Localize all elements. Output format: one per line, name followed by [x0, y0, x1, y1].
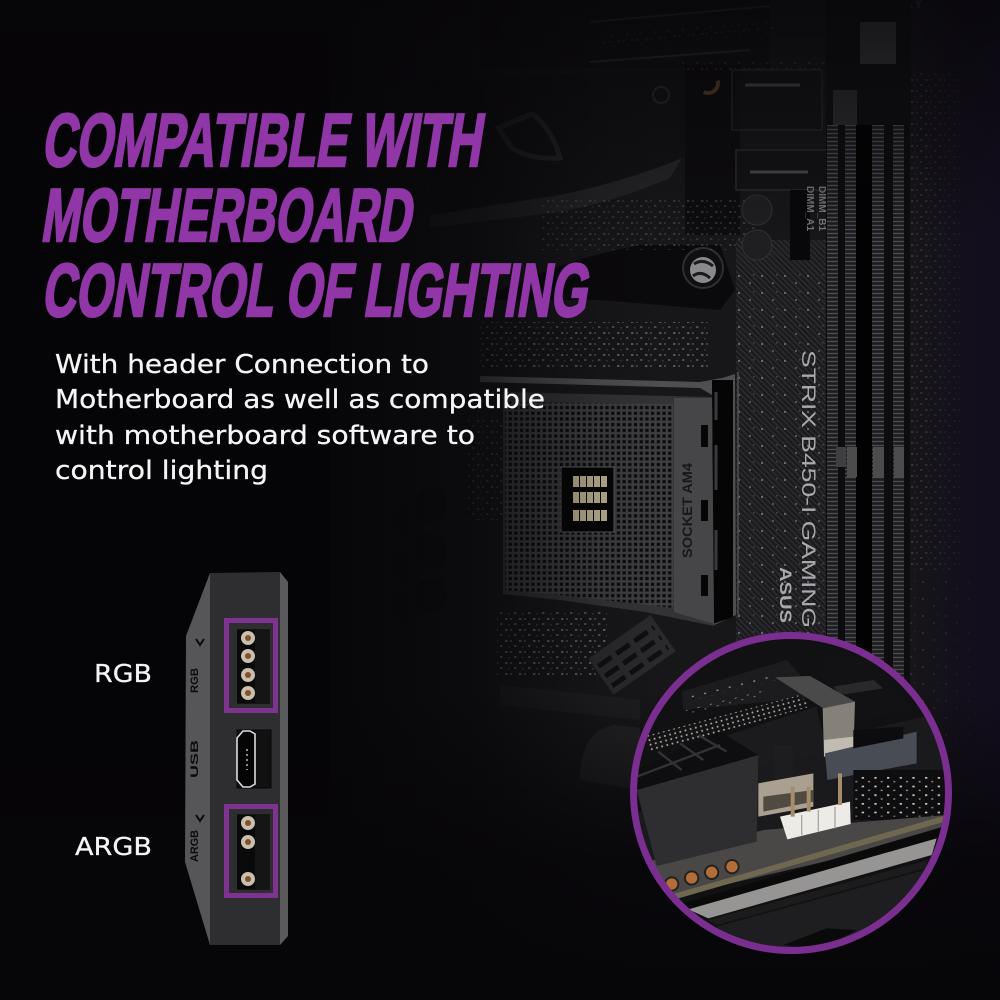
socket label: SOCKET AM4: [679, 463, 695, 558]
board text: ASUS: [776, 567, 795, 623]
side labels: [189, 639, 204, 862]
component dots field: [468, 60, 980, 750]
8-pin power connector: [637, 732, 758, 866]
bottom dark area: [717, 870, 925, 953]
board text: [776, 350, 818, 628]
title: CONTROL OF LIGHTING: [38, 248, 597, 332]
circular connector close-up: [630, 633, 953, 957]
lower dark heatsink: [480, 245, 735, 310]
body text: With header Connection to: [55, 350, 429, 380]
SATA ports: [732, 70, 831, 190]
metal bracket: [775, 676, 855, 708]
screw: [683, 248, 723, 288]
title: [37, 98, 597, 332]
icon: ROG circuit art: [588, 615, 676, 695]
body text: [55, 350, 545, 486]
white connector: [780, 773, 851, 839]
lower component area: [853, 770, 947, 820]
board background: [630, 633, 953, 957]
socket centre: [561, 467, 614, 532]
purple ring: [634, 636, 948, 950]
title: MOTHERBOARD: [37, 173, 421, 257]
gold pads: [665, 860, 739, 891]
side labels: ARGB: [189, 830, 201, 862]
CPU socket: [480, 372, 738, 626]
side labels: RGB: [189, 668, 201, 693]
front face: [210, 572, 288, 945]
USB port: [237, 730, 271, 788]
silver heatsink strip: [688, 838, 937, 918]
metal latch: [758, 773, 813, 817]
label: ARGB: ARGB: [75, 832, 152, 861]
heatsink screw hole: [653, 87, 669, 103]
RGB highlight box: [226, 620, 276, 710]
title: COMPATIBLE WITH: [38, 98, 491, 182]
blue-grey connector: [825, 732, 917, 780]
body text: control lighting: [55, 456, 268, 486]
top right connector: [820, 657, 913, 723]
side wedge: [185, 573, 210, 945]
body text: with motherboard software to: [55, 421, 475, 451]
PCIe slot: [643, 695, 810, 752]
side labels: USB: [189, 740, 201, 778]
ARGB highlight box: [226, 806, 276, 896]
PCIe slots at top: [480, 0, 775, 68]
jumper: [773, 745, 793, 778]
gold pins: [573, 476, 607, 521]
memory connector: [826, 0, 911, 725]
pin header: [682, 660, 806, 710]
icon: ROG logo: [498, 114, 560, 158]
label: RGB: RGB: [94, 659, 152, 688]
device: LED controller: [185, 572, 288, 945]
board text: STRIX B450-I GAMING: [797, 350, 818, 628]
board edge: [673, 816, 943, 899]
lower heatsink curve: [500, 685, 640, 790]
capacitors: [391, 190, 810, 622]
DIMM labels: DIMM_B1: [816, 186, 827, 231]
RGB port: [237, 629, 270, 704]
motherboard photo: [330, 0, 1000, 1000]
VRM heatsink: [430, 65, 740, 235]
ARGB port: [237, 814, 270, 890]
board strip: [652, 815, 944, 894]
DIMM labels: DIMM_A1: [804, 186, 815, 231]
DIMM labels: [804, 186, 827, 231]
body text: Motherboard as well as compatible: [55, 385, 545, 415]
